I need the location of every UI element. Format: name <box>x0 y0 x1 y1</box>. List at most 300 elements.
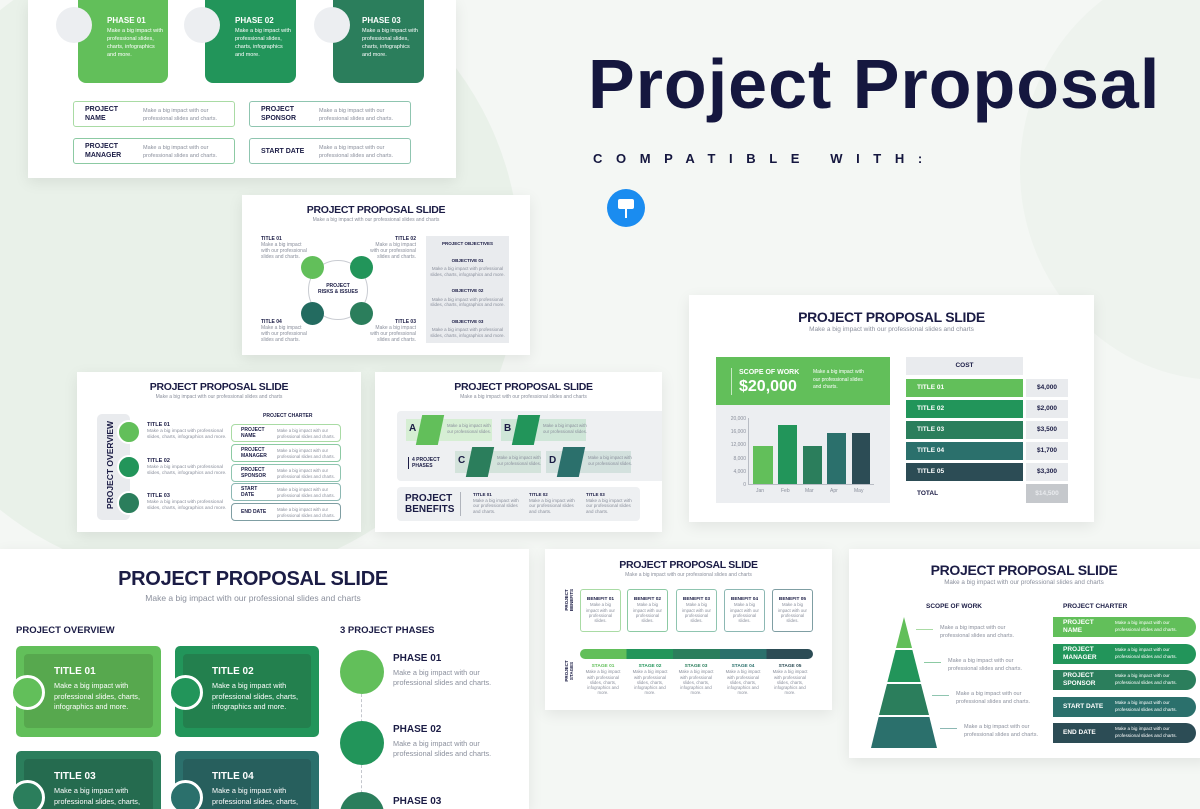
slide F: overview and 3 phases: PROJECT PROPOSAL SLIDE <box>118 568 388 590</box>
slide C: overview and charter: SPONSOR <box>241 473 266 479</box>
scope of work box: our professional slides <box>813 376 863 382</box>
slide G: benefits and stages: BENEFIT 02 <box>634 597 661 602</box>
slide G: benefits and stages: with professional <box>774 675 806 680</box>
slide E: cost chart: TITLE 05 <box>917 468 944 475</box>
bar chart: Mar <box>805 488 814 494</box>
slide G: benefits and stages: STAGES <box>569 662 574 680</box>
slide H: pyramid and charter: END DATE <box>1063 729 1096 736</box>
slide G: benefits and stages: Make a big impact <box>633 669 667 674</box>
slide F: overview and 3 phases: PHASE 03 <box>393 796 441 807</box>
slide G: benefits and stages: STAGE 01 <box>592 664 614 669</box>
objectives panel: slides, charts, infographics and more. <box>430 272 505 276</box>
slide H: pyramid and charter: PROJECT <box>1063 619 1094 626</box>
slide C: overview and charter: professional slides and charts. <box>277 454 335 458</box>
slide G: benefits and stages: slides. <box>738 618 751 623</box>
slide C: overview and charter: END DATE <box>241 509 266 515</box>
slide G: benefits and stages: BENEFITS <box>569 589 574 611</box>
slide H: pyramid and charter: professional slides and charts. <box>1115 706 1177 712</box>
slide G: benefits and stages: more. <box>690 690 701 695</box>
phases panel: D <box>549 455 556 466</box>
slide G: benefits and stages: PROJECT <box>564 589 569 611</box>
stage bar <box>580 649 813 659</box>
slide C: overview and charter: DATE <box>241 492 254 498</box>
phases panel: our professional slides. <box>447 428 491 434</box>
benefits panel: PROJECT <box>405 493 452 504</box>
slide H: pyramid and charter: Make a big impact with our <box>956 691 1021 697</box>
slide C: overview and charter: Make a big impact with our <box>277 428 328 433</box>
charter: PROJECT CHARTER <box>1063 603 1127 610</box>
slide G: benefits and stages: Make a big impact <box>679 669 713 674</box>
slide H: pyramid and charter: professional slides and charts. <box>948 666 1022 672</box>
icon: keynote <box>607 189 645 227</box>
slide B: risks and issues: slides and charts. <box>377 254 416 260</box>
slide G: benefits and stages: BENEFIT 03 <box>683 597 710 602</box>
titles: TITLE 01 <box>261 236 282 242</box>
slide G: benefits and stages: with professional <box>634 675 666 680</box>
bar chart: 12,000 <box>731 442 746 448</box>
slide H: pyramid and charter: Make a big impact with our <box>1115 647 1170 652</box>
bar chart: 0 <box>743 482 746 488</box>
slide H: pyramid and charter: Make a big impact with our professional slides and charts <box>944 579 1104 586</box>
slide H: pyramid and charter: PROJECT <box>1063 646 1094 653</box>
info box: sponsor: PROJECT <box>261 106 294 113</box>
slide B: risks and issues: Make a big impact <box>375 325 416 331</box>
slide G: benefits and stages: slides, charts, <box>637 680 663 685</box>
phases panel: our professional slides. <box>497 460 541 466</box>
slide G: benefits and stages: STAGE 02 <box>639 664 661 669</box>
overview titles: TITLE 01 <box>147 422 170 428</box>
slide C: overview and charter: slides, charts, infographics and more. <box>147 471 226 476</box>
titles: with our professional <box>261 248 307 254</box>
slide C: overview and charter: PROJECT <box>241 447 265 453</box>
slide G: benefits and stages: professional <box>636 613 659 618</box>
slide D: phases and benefits: PROJECT PROPOSAL SLIDE <box>454 381 593 393</box>
scope of work box <box>716 357 890 405</box>
phases panel: A <box>409 423 416 434</box>
slide B: risks and issues: with our professional <box>261 331 307 337</box>
pyramid labels <box>916 625 1014 639</box>
info box: project name <box>73 101 235 127</box>
slide G: benefits and stages: Make a big impact <box>773 669 807 674</box>
benefits panel: TITLE 01 <box>473 492 492 497</box>
phase card 3: PHASE 03 <box>362 16 401 25</box>
slide F: overview and 3 phases: PHASE 01 <box>393 653 441 664</box>
slide G: benefits and stages: professional <box>781 613 804 618</box>
slide C: overview and charter: NAME <box>241 433 256 439</box>
slide C: overview and charter <box>77 372 361 532</box>
phases panel <box>397 411 667 481</box>
overview card 3: professional slides, charts, <box>54 796 140 806</box>
slide C: overview and charter: slides, charts, infographics and more. <box>147 506 226 511</box>
slide G: benefits and stages: slides, charts, <box>590 680 616 685</box>
pyramid <box>871 617 937 748</box>
slide H: pyramid and charter: PROJECT <box>1063 672 1094 679</box>
objectives panel: Make a big impact with professional <box>432 327 503 332</box>
info box: sponsor: Make a big impact with our <box>319 108 384 114</box>
slide G: benefits and stages: with professional <box>727 675 759 680</box>
slide B: risks and issues <box>242 195 530 355</box>
ring diagram: PROJECT <box>326 283 350 289</box>
bar chart <box>716 405 890 503</box>
slide G: benefits and stages: STAGE 03 <box>685 664 707 669</box>
slide H: pyramid and charter: Make a big impact with our <box>940 625 1005 631</box>
slide H: pyramid and charter: Make a big impact with our <box>1115 673 1170 678</box>
phase card 2: Make a big impact with professional slides, charts, infographics and more. <box>235 28 291 58</box>
slide G: benefits and stages: Make a big <box>734 602 755 607</box>
slide C: overview and charter: Make a big impact with our <box>277 487 328 492</box>
slide G: benefits and stages: Make a big <box>686 602 707 607</box>
slide G: benefits and stages: infographics and <box>587 685 619 690</box>
slide G: benefits and stages: slides. <box>690 618 703 623</box>
3 phases: 3 PROJECT PHASES <box>340 625 434 636</box>
scope of work box: and charts. <box>813 384 838 390</box>
slide G: benefits and stages: slides, charts, <box>777 680 803 685</box>
phases panel: our professional slides. <box>588 460 632 466</box>
overview card 1: professional slides, charts, <box>54 692 140 700</box>
overview circles <box>117 420 141 444</box>
slide G: benefits and stages: impact with our <box>730 608 759 613</box>
slide H: pyramid and charter: professional slides and charts. <box>1115 680 1177 684</box>
phase card 1: Make a big impact with professional slides, charts, infographics and more. <box>107 28 163 58</box>
benefits panel: and charts. <box>586 508 608 514</box>
phase card 2: PHASE 02 <box>235 16 274 25</box>
slide G: benefits and stages: more. <box>598 690 608 695</box>
bar chart: 20,000 <box>731 416 746 422</box>
slide G: benefits and stages: BENEFIT 05 <box>779 597 806 602</box>
slide E: cost chart: $3,300 <box>1037 468 1057 475</box>
slide C: overview and charter: professional slides and charts. <box>277 492 335 498</box>
slide H: pyramid and charter: NAME <box>1063 627 1082 634</box>
info box: sponsor: SPONSOR <box>261 114 296 122</box>
bar chart: 16,000 <box>731 429 746 435</box>
slide B: risks and issues: Make a big impact <box>375 242 416 248</box>
scope of work box: $20,000 <box>739 378 797 395</box>
slide B: risks and issues: TITLE 02 <box>395 236 416 242</box>
slide B: risks and issues: Make a big impact with our professional slides and charts <box>313 217 439 223</box>
overview titles <box>147 422 226 440</box>
benefits panel: Make a big impact with <box>529 498 575 502</box>
overview card 1: Make a big impact with <box>54 681 128 690</box>
overview card 1: infographics and more. <box>54 702 128 711</box>
benefit boxes: slides. <box>594 618 607 623</box>
slide G: benefits and stages: infographics and <box>727 685 759 690</box>
info box: sponsor: professional slides and charts. <box>319 116 393 122</box>
slide C: overview and charter: Make a big impact with our <box>277 448 328 453</box>
overview card 4 <box>175 751 319 809</box>
objectives panel: Make a big impact with professional <box>432 296 503 302</box>
slide G: benefits and stages: STAGE 05 <box>779 664 801 669</box>
phases panel: our professional slides. <box>543 428 587 434</box>
slide G: benefits and stages: more. <box>738 690 748 695</box>
slide H: pyramid and charter: professional slides and charts. <box>964 732 1038 738</box>
phases panel: PHASES <box>412 463 433 469</box>
info box: project name: Make a big impact with our <box>143 108 208 114</box>
phase card 1 <box>78 0 168 83</box>
slide G: benefits and stages: impact with our <box>682 608 711 613</box>
bar chart: Apr <box>830 488 838 494</box>
slide H: pyramid and charter: professional slides and charts. <box>1115 626 1177 632</box>
slide H: pyramid and charter: Make a big impact with our <box>964 724 1029 730</box>
bar chart: May <box>854 488 863 494</box>
slide B: risks and issues: TITLE 04 <box>261 319 282 325</box>
slide F: overview and 3 phases: Make a big impact with our <box>393 668 480 676</box>
slide G: benefits and stages: slides, charts, <box>730 680 756 685</box>
benefits panel: and charts. <box>473 508 495 514</box>
objectives panel: OBJECTIVE 03 <box>452 318 483 324</box>
main title: Project Proposal <box>588 45 1160 123</box>
slide B: risks and issues: with our professional <box>370 331 416 337</box>
slide C: overview and charter: PROJECT PROPOSAL SLIDE <box>150 381 288 393</box>
slide F: overview and 3 phases: Make a big impact with our professional slides and charts <box>145 593 361 603</box>
info box: manager: professional slides and charts. <box>143 153 217 159</box>
slide C: overview and charter: Make a big impact with our professional slides and charts <box>156 394 282 400</box>
slide F: overview and 3 phases: professional slides and charts. <box>393 749 491 758</box>
slide E: cost chart: TITLE 02 <box>917 405 944 412</box>
overview card 2: infographics and more. <box>212 702 286 711</box>
slide H: pyramid and charter: professional slides and charts. <box>1115 732 1177 738</box>
overview card 2 <box>175 646 319 737</box>
slide G: benefits and stages: PROJECT <box>564 660 569 682</box>
benefits panel: and charts. <box>529 508 551 514</box>
slide G: benefits and stages: more. <box>784 690 795 695</box>
slide G: benefits and stages: infographics and <box>634 685 666 690</box>
phases panel: 4 PROJECT <box>412 457 440 463</box>
background blobs <box>0 0 520 580</box>
compatible with label: COMPATIBLE WITH: <box>593 151 936 166</box>
ring diagram: RISKS & ISSUES <box>318 289 358 295</box>
benefits panel: our professional slides <box>473 503 518 508</box>
info box: manager: Make a big impact with our <box>143 145 208 151</box>
phases panel: Make a big impact with <box>543 423 587 428</box>
titles <box>261 236 307 260</box>
info box: sponsor <box>249 101 411 127</box>
overview card 4: professional slides, charts, <box>212 796 298 806</box>
benefits panel <box>397 487 640 521</box>
titles: slides and charts. <box>261 254 300 260</box>
slide H: pyramid and charter: professional slides and charts. <box>1115 654 1177 658</box>
slide H: pyramid and charter: START DATE <box>1063 703 1103 710</box>
benefits panel: our professional slides <box>529 503 574 508</box>
benefits panel: TITLE 02 <box>529 492 548 497</box>
slide F: overview and 3 phases: Make a big impact with our <box>393 738 480 748</box>
slide D: phases and benefits <box>375 372 662 532</box>
overview titles: Make a big impact with professional <box>147 429 223 434</box>
info box: project name: PROJECT <box>85 106 118 113</box>
objectives panel: Make a big impact with professional <box>432 266 503 271</box>
slide E: cost chart: TITLE 03 <box>917 426 944 433</box>
benefits panel: Make a big impact with <box>473 498 519 502</box>
slide C: overview and charter: TITLE 02 <box>147 458 170 464</box>
objectives panel: slides, charts, infographics and more. <box>430 302 505 307</box>
slide H: pyramid and charter <box>849 549 1200 758</box>
slide C: overview and charter: START <box>241 486 257 492</box>
benefit boxes: Make a big <box>590 602 611 607</box>
slide E: cost chart: $2,000 <box>1037 405 1057 412</box>
slide H: pyramid and charter: professional slides and charts. <box>956 699 1030 705</box>
slide G: benefits and stages: Make a big impact with our professional slides and charts <box>625 572 752 578</box>
phase card 2 <box>205 0 296 83</box>
slide F: overview and 3 phases <box>0 549 529 809</box>
overview titles: slides, charts, infographics and more. <box>147 435 226 440</box>
benefits panel: TITLE 03 <box>586 492 605 497</box>
phase card 3: Make a big impact with professional slides, charts, infographics and more. <box>362 28 418 58</box>
slide G: benefits and stages: professional <box>685 613 708 618</box>
objectives panel: OBJECTIVE 01 <box>452 258 483 262</box>
phases panel: C <box>458 455 465 466</box>
slide B: risks and issues: with our professional <box>370 248 416 254</box>
slide H: pyramid and charter: SCOPE OF WORK <box>926 603 982 610</box>
slide G: benefits and stages: professional <box>733 613 756 618</box>
overview card 1: TITLE 01 <box>54 666 96 677</box>
overview card 3 <box>16 751 161 809</box>
phases panel: Make a big impact with <box>447 423 491 428</box>
heading: PROJECT PROPOSAL SLIDE <box>307 204 445 216</box>
benefit boxes: BENEFIT 01 <box>587 597 614 602</box>
stage labels <box>586 664 808 695</box>
slide G: benefits and stages: infographics and <box>774 685 806 690</box>
overview card 1 <box>16 646 161 737</box>
slide F: overview and 3 phases: professional slides and charts. <box>393 678 491 687</box>
info box: manager <box>73 138 235 164</box>
slide E: cost chart: TITLE 04 <box>917 447 944 454</box>
slide C: overview and charter: MANAGER <box>241 453 267 459</box>
slide C: overview and charter: TITLE 03 <box>147 493 170 499</box>
slide G: benefits and stages: with professional <box>587 675 619 680</box>
card icons <box>10 675 45 710</box>
slide H: pyramid and charter: professional slides and charts. <box>940 633 1014 639</box>
info box: project name: NAME <box>85 114 106 122</box>
slide G: benefits and stages: impact with our <box>778 608 807 613</box>
benefits panel: BENEFITS <box>405 504 454 515</box>
benefit boxes <box>580 589 621 632</box>
slide G: benefits and stages: Make a big <box>782 602 803 607</box>
phases panel: Make a big impact with <box>497 455 541 460</box>
overview card 2: professional slides, charts, <box>212 692 298 700</box>
slide E: cost chart: PROJECT PROPOSAL SLIDE <box>798 309 985 325</box>
slide C: overview and charter: Make a big impact with our <box>277 468 328 473</box>
slide D: phases and benefits: Make a big impact with our professional slides and charts <box>460 394 587 400</box>
overview card 3: Make a big impact with <box>54 786 128 795</box>
bar chart: Jan <box>756 488 764 494</box>
cost table <box>906 357 1023 375</box>
slide G: benefits and stages: infographics and <box>680 685 712 690</box>
slide C: overview and charter: PROJECT <box>241 427 265 433</box>
slide C: overview and charter: PROJECT <box>241 467 265 473</box>
slide B: risks and issues: TITLE 03 <box>395 319 416 325</box>
slide H: pyramid and charter: Make a big impact with our <box>1115 726 1170 731</box>
slide C: overview and charter: professional slides and charts. <box>277 512 335 518</box>
slide H: pyramid and charter: Make a big impact with our <box>948 658 1013 664</box>
slide G: benefits and stages: BENEFIT 04 <box>731 597 758 602</box>
slide G: benefits and stages: Make a big impact <box>586 669 620 674</box>
overview card 4: TITLE 04 <box>212 771 254 782</box>
slide H: pyramid and charter: SPONSOR <box>1063 680 1096 687</box>
info box: start date: professional slides and charts. <box>319 153 393 159</box>
overview card 3: TITLE 03 <box>54 771 96 782</box>
slide G: benefits and stages: PROJECT PROPOSAL SLIDE <box>619 559 758 571</box>
slide G: benefits and stages: with professional <box>680 675 712 680</box>
slide E: cost chart <box>689 295 1094 522</box>
slide G: benefits and stages <box>545 549 832 710</box>
info box: manager: MANAGER <box>85 152 121 158</box>
slide F: overview and 3 phases: PROJECT OVERVIEW <box>16 625 115 636</box>
slide A: phases and info boxes <box>28 0 456 178</box>
benefits panel: Make a big impact with <box>586 498 632 502</box>
objectives panel: OBJECTIVE 02 <box>452 288 483 293</box>
icon circles <box>56 7 92 43</box>
benefits panel: our professional slides <box>586 503 631 508</box>
slide B: risks and issues: Make a big impact <box>261 325 302 331</box>
slide E: cost chart: Make a big impact with our professional slides and charts <box>809 326 974 333</box>
objectives panel <box>426 236 509 343</box>
slide H: pyramid and charter: MANAGER <box>1063 654 1097 661</box>
info box: start date: Make a big impact with our <box>319 145 384 151</box>
ring diagram <box>301 256 373 325</box>
benefit boxes: professional <box>589 613 612 618</box>
slide G: benefits and stages: more. <box>644 690 655 695</box>
slide E: cost chart: TITLE 01 <box>917 384 944 391</box>
slide G: benefits and stages: Make a big <box>637 602 658 607</box>
overview card 4: Make a big impact with <box>212 786 286 795</box>
benefit boxes: impact with our <box>586 608 615 613</box>
objectives panel: slides, charts, infographics and more. <box>430 332 505 338</box>
slide E: cost chart: $4,000 <box>1037 384 1057 391</box>
slide C: overview and charter: professional slides and charts. <box>277 434 335 438</box>
slide G: benefits and stages: slides, charts, <box>683 680 709 685</box>
phases panel: B <box>504 423 511 434</box>
slide E: cost chart: TOTAL <box>917 490 938 497</box>
scope of work box: Make a big impact with <box>813 369 864 375</box>
slide C: overview and charter: Make a big impact with our <box>277 507 328 512</box>
slide B: risks and issues: slides and charts. <box>377 337 416 343</box>
info box: start date: START DATE <box>261 148 304 155</box>
slide C: overview and charter: Make a big impact with professional <box>147 465 223 470</box>
slide F: overview and 3 phases: PHASE 02 <box>393 724 441 735</box>
phases panel: Make a big impact with <box>588 455 632 460</box>
titles: Make a big impact <box>261 242 302 248</box>
phase card 1: PHASE 01 <box>107 16 146 25</box>
info box: project name: professional slides and charts. <box>143 116 217 122</box>
slide G: benefits and stages: slides. <box>786 618 799 623</box>
slide G: benefits and stages: STAGE 04 <box>732 664 754 669</box>
info box: manager: PROJECT <box>85 143 118 150</box>
charter list: PROJECT CHARTER <box>263 413 312 419</box>
slide G: benefits and stages: impact with our <box>633 608 662 613</box>
vertical overview panel <box>97 414 130 520</box>
bar chart: 4,000 <box>733 469 746 475</box>
slide C: overview and charter: Make a big impact with professional <box>147 500 223 505</box>
slide B: risks and issues: slides and charts. <box>261 337 300 343</box>
overview card 2: TITLE 02 <box>212 666 254 677</box>
slide E: cost chart: $14,500 <box>1035 490 1059 497</box>
slide H: pyramid and charter: Make a big impact with our <box>1115 700 1170 705</box>
bar chart: Feb <box>781 488 790 494</box>
slide H: pyramid and charter: Make a big impact with our <box>1115 620 1170 625</box>
cost table: COST <box>955 362 974 369</box>
slide G: benefits and stages: Make a big impact <box>726 669 760 674</box>
objectives panel: PROJECT OBJECTIVES <box>442 241 493 246</box>
scope of work box: SCOPE OF WORK <box>739 369 799 376</box>
slide E: cost chart: $3,500 <box>1037 426 1057 433</box>
vertical overview panel: PROJECT OVERVIEW <box>105 421 115 509</box>
phase card 3 <box>333 0 424 83</box>
info box: start date <box>249 138 411 164</box>
overview card 2: Make a big impact with <box>212 681 286 690</box>
slide E: cost chart: $1,700 <box>1037 447 1057 454</box>
slide H: pyramid and charter: PROJECT PROPOSAL SLIDE <box>931 562 1117 578</box>
slide C: overview and charter: professional slides and charts. <box>277 474 335 478</box>
slide G: benefits and stages: slides. <box>641 618 654 623</box>
